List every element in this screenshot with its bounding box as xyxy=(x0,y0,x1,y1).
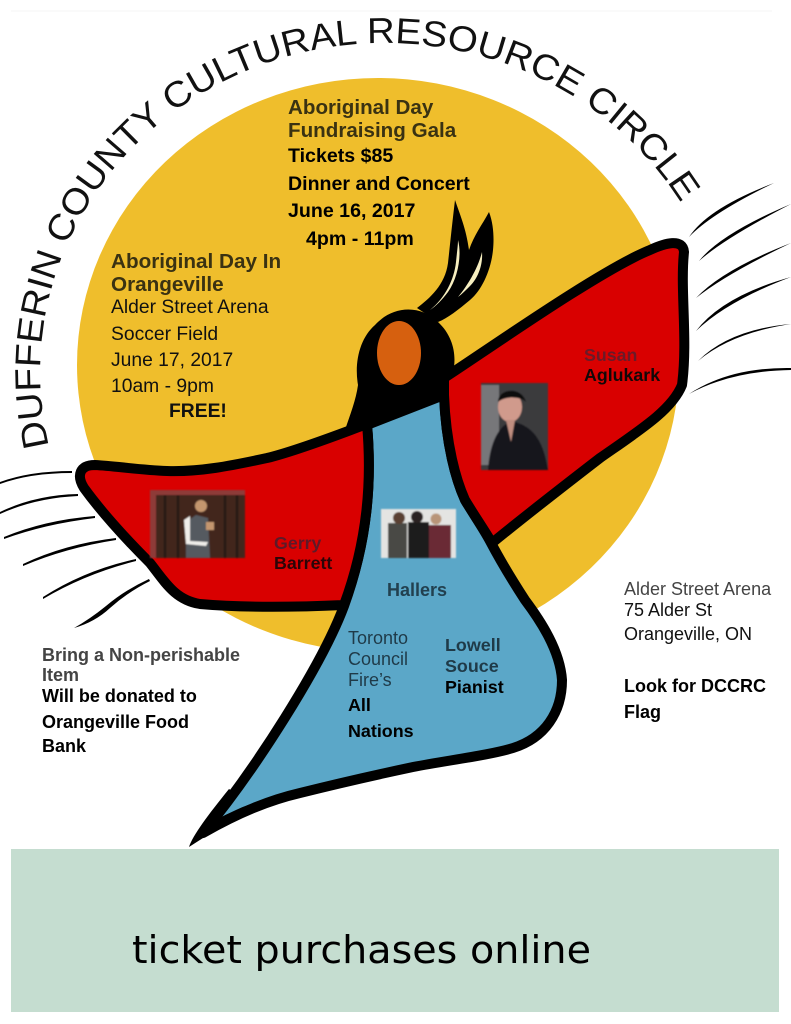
text: venue address: Alder Street Arena xyxy=(624,579,772,599)
label: Gerry Barrett: Gerry xyxy=(274,533,322,553)
label: Toronto Council Fire's All Nations: Toronto xyxy=(348,628,408,648)
footer panel xyxy=(11,849,779,1012)
photo: Susan Aglukark xyxy=(481,383,548,470)
text: aboriginal day in orangeville: Aboriginal Day In xyxy=(111,250,281,273)
text: fundraising gala: Fundraising Gala xyxy=(288,119,457,142)
left wing xyxy=(80,424,369,607)
photo: Hallers band xyxy=(381,509,456,558)
text: fundraising gala: June 16, 2017 xyxy=(288,200,416,222)
label: Gerry Barrett: Barrett xyxy=(274,553,332,573)
right wing xyxy=(444,243,684,543)
rays: left wing xyxy=(0,471,150,628)
text: food bank note: Bring a Non-perishable xyxy=(42,645,240,665)
text: food bank note: Item xyxy=(42,665,79,685)
label: Toronto Council Fire's All Nations xyxy=(348,628,414,741)
rays: right wing xyxy=(689,183,791,394)
label: Susan Aglukark: Aglukark xyxy=(584,365,660,385)
feathers xyxy=(417,200,494,322)
footer text: ticket purchases online xyxy=(132,928,591,972)
text: food bank note xyxy=(42,645,240,756)
text: venue address: Orangeville, ON xyxy=(624,624,752,644)
bird body xyxy=(203,395,562,833)
label: Toronto Council Fire's All Nations: Nations xyxy=(348,721,414,741)
yellow sun circle xyxy=(77,78,679,652)
bird body tail tip xyxy=(189,789,263,847)
label: Lowell Souce Pianist xyxy=(445,635,504,697)
text: food bank note: Bank xyxy=(42,736,87,756)
bird head xyxy=(345,310,454,430)
label: Gerry Barrett xyxy=(274,533,332,573)
text: food bank note: Orangeville Food xyxy=(42,712,189,732)
label: Toronto Council Fire's All Nations: Council xyxy=(348,649,408,669)
label: Lowell Souce Pianist: Lowell xyxy=(445,635,501,655)
photo: Gerry Barrett xyxy=(150,490,245,558)
text: aboriginal day in orangeville: Alder Street Arena xyxy=(111,297,269,318)
text: fundraising gala: Aboriginal Day xyxy=(288,96,434,119)
text: aboriginal day in orangeville: Soccer Field xyxy=(111,324,218,345)
text: venue address: Look for DCCRC xyxy=(624,676,766,696)
text: venue address: 75 Alder St xyxy=(624,600,712,620)
label: Susan Aglukark: Susan xyxy=(584,345,637,365)
text: venue address xyxy=(624,579,772,722)
label: Susan Aglukark xyxy=(584,345,660,385)
label: Lowell Souce Pianist: Pianist xyxy=(445,677,504,697)
text: fundraising gala xyxy=(288,96,470,250)
label: Hallers: Hallers xyxy=(387,580,447,600)
text: aboriginal day in orangeville: 10am - 9pm xyxy=(111,376,214,397)
text: fundraising gala: Tickets $85 xyxy=(288,145,393,167)
text: fundraising gala: Dinner and Concert xyxy=(288,173,470,195)
text: aboriginal day in orangeville: Orangeville xyxy=(111,273,224,296)
text: fundraising gala: 4pm - 11pm xyxy=(306,228,414,250)
text: food bank note: Will be donated to xyxy=(42,686,197,706)
label: Toronto Council Fire's All Nations: Fire’s xyxy=(348,670,392,690)
text: aboriginal day in orangeville: June 17, 2017 xyxy=(111,350,233,371)
text: aboriginal day in orangeville: FREE! xyxy=(169,401,227,422)
head orange oval xyxy=(377,321,421,385)
text: venue address: Flag xyxy=(624,702,661,722)
label: Lowell Souce Pianist: Souce xyxy=(445,656,499,676)
label: Toronto Council Fire's All Nations: All xyxy=(348,695,371,715)
text: aboriginal day in orangeville xyxy=(111,250,281,422)
title: curved organisation name: DUFFERIN COUNTY CULTURAL RESOURCE CIRCLE xyxy=(15,18,700,448)
